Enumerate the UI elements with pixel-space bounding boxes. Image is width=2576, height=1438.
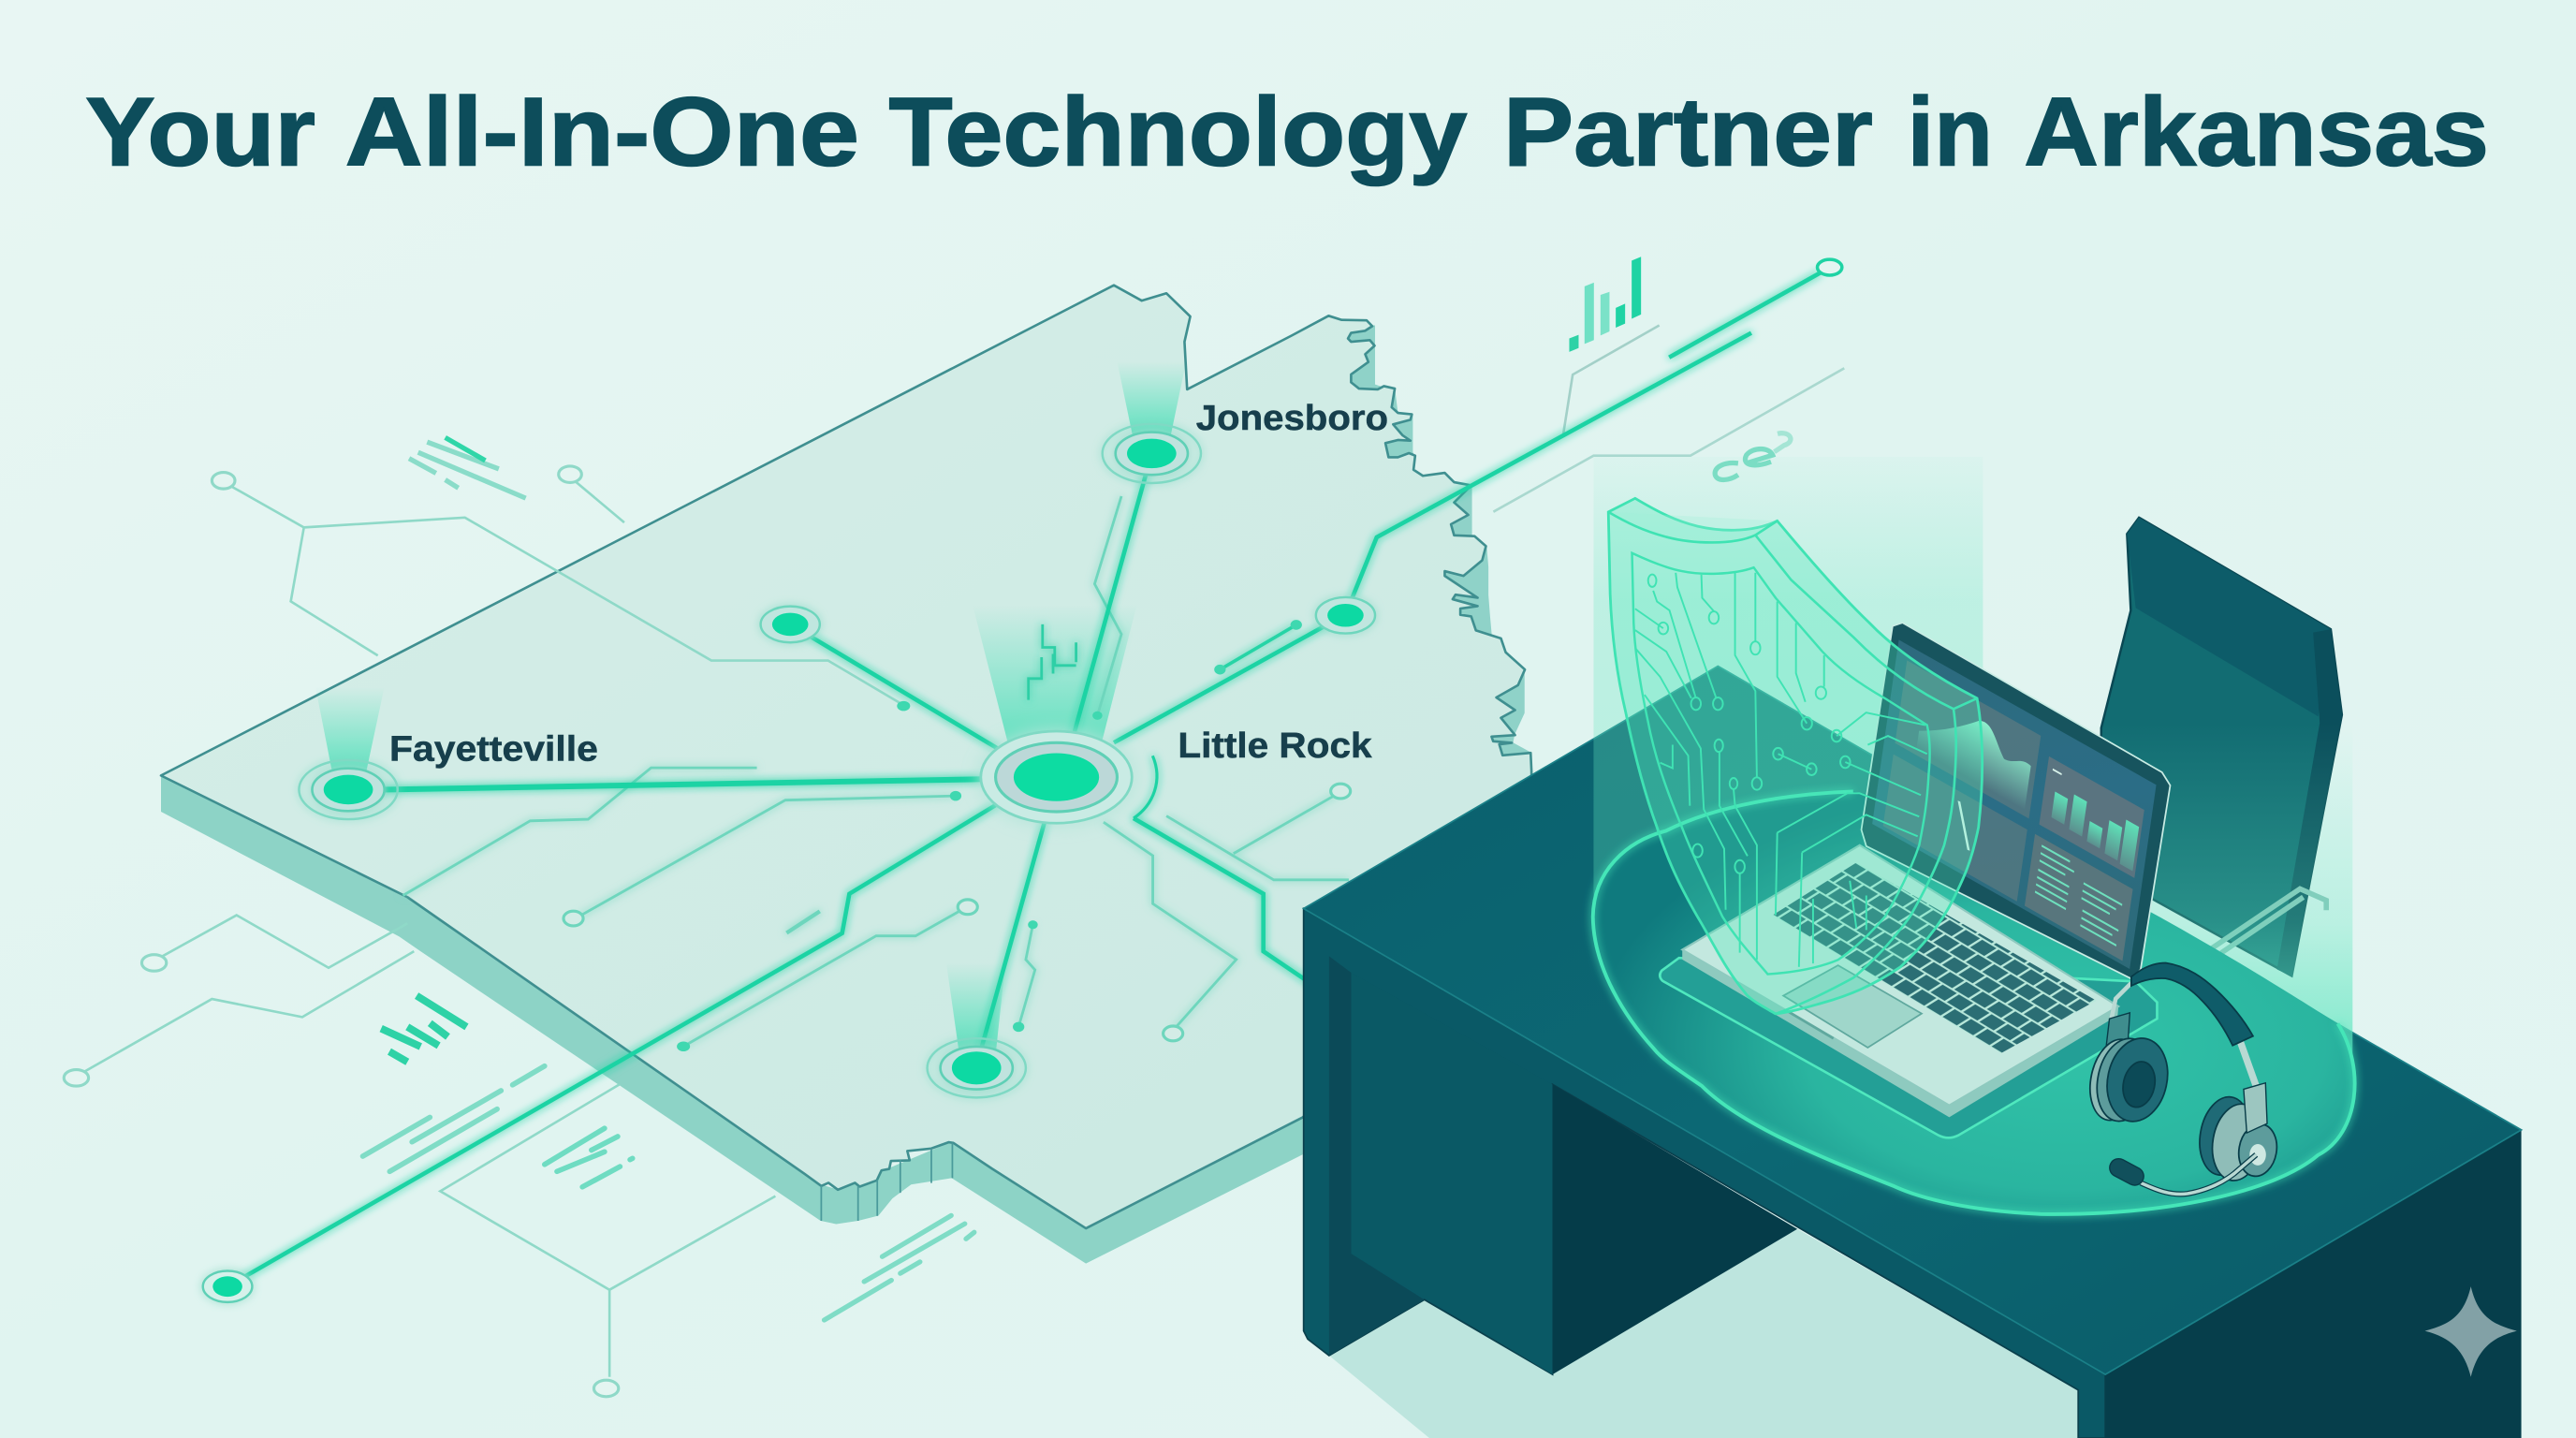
hologram right light column (1983, 723, 2352, 1086)
beam: Fayetteville (315, 687, 385, 779)
title: Arkansas (2024, 78, 2489, 186)
screen panel: list (1883, 755, 2027, 902)
dot: north trace (1092, 712, 1103, 720)
map of Arkansas (161, 286, 1533, 1264)
city label: Fayetteville: Fayetteville (389, 729, 598, 769)
shield silhouette (1608, 498, 1983, 1014)
map surface (161, 286, 1533, 1228)
headset left ear cup (2083, 1033, 2175, 1127)
laptop screen frame (1862, 623, 2170, 979)
pin: east node (1316, 597, 1375, 634)
line: Little Rock to south node (976, 814, 1046, 1068)
chair back (2101, 518, 2342, 976)
title: Partner (1503, 78, 1873, 186)
map pins (203, 424, 1375, 1302)
chair right edge (2277, 629, 2342, 976)
line: west node to Little Rock (790, 624, 999, 749)
headset left arm (2111, 983, 2131, 1020)
dot: west trace (897, 701, 910, 711)
desk side face (2105, 1130, 2522, 1438)
circuit: north west short (574, 479, 624, 522)
dot: south trace top (1028, 920, 1038, 929)
hologram left light column (1593, 457, 1983, 933)
node ring north west (212, 473, 235, 489)
circuit: north west (228, 485, 900, 703)
icon: north west data lines (409, 437, 526, 498)
icon: top right bar chart (1569, 257, 1641, 352)
desk body front (1304, 909, 2105, 1438)
trace: centre west (578, 796, 956, 917)
title: Your (85, 78, 315, 186)
screen panel: bar chart (2039, 756, 2144, 878)
line: Little Rock to far south west (227, 798, 1008, 1286)
pin: Little Rock hub (981, 731, 1132, 823)
pin light beams (315, 361, 1186, 1055)
watermark sparkle (2425, 1286, 2517, 1377)
pin: west node (761, 607, 820, 642)
desk top surface (1304, 666, 2522, 1374)
trace: north centre (1094, 496, 1121, 715)
circuit: chart leader (1563, 325, 1660, 433)
shield circuit traces (1635, 573, 1927, 967)
laptop base (1682, 845, 2118, 1106)
trace: south east lower (1104, 822, 1237, 1029)
pin: far south west node (203, 1271, 252, 1302)
trace: south parallel (1018, 925, 1035, 1027)
desk (1304, 666, 2522, 1438)
circuit: west lower (82, 951, 414, 1073)
shield top bevel (1608, 512, 1778, 542)
city label: Little Rock: Little Rock (1178, 726, 1373, 765)
node ring south (593, 1380, 619, 1397)
node ring west lower (64, 1070, 89, 1086)
title (85, 78, 2489, 186)
shadow: desk on floor (1329, 1229, 2078, 1438)
headset microphone boom (2141, 1154, 2256, 1195)
title: in (1908, 78, 1993, 186)
hologram base halo (1593, 791, 2355, 1214)
title: Technology (889, 78, 1468, 186)
desk under shadow (1553, 1084, 1797, 1374)
trace: south west parallel (683, 910, 961, 1047)
icon: south west data lines (363, 1066, 545, 1171)
line: Jonesboro to Little Rock (1068, 453, 1151, 756)
map trace end points (677, 620, 1302, 1051)
desk inner panel shadow (1329, 956, 1425, 1356)
dot: south trace bottom (1013, 1022, 1024, 1032)
headset left slider (2106, 1013, 2130, 1046)
laptop hinge notch (1789, 1012, 1834, 1038)
screen panel: text table (2025, 834, 2133, 961)
headset knob (2249, 1144, 2266, 1166)
headset band (2131, 962, 2253, 1046)
map east wall (1314, 325, 1531, 772)
chair headrest (2127, 518, 2331, 716)
city label: Jonesboro: Jonesboro (1196, 398, 1388, 437)
circuit: south west tree (440, 1084, 775, 1377)
icon: floating symbols (1715, 433, 1791, 479)
title: All-In-One (345, 78, 859, 186)
pin: south node (928, 1038, 1026, 1097)
shield circuit nodes (1648, 575, 1851, 873)
trace: west branch (403, 768, 757, 895)
line: north east short (1669, 272, 1821, 358)
icon: south east data lines (825, 1215, 974, 1320)
trace: small chip circuit (1029, 624, 1076, 700)
halo glowing rim (1593, 791, 2355, 1214)
laptop trackpad (1783, 965, 1922, 1048)
pin: Fayetteville (299, 760, 398, 819)
background circuit lines (82, 325, 1844, 1377)
holographic shield (1608, 498, 1983, 1014)
beam: Jonesboro (1117, 361, 1186, 440)
icon: south data lines block (545, 1128, 633, 1187)
map slab side (161, 775, 1303, 1264)
beam: Little Rock (973, 605, 1137, 759)
top right end node (1817, 259, 1842, 275)
halo fill (1593, 791, 2355, 1214)
chair (2101, 518, 2342, 976)
node ring north (559, 466, 581, 482)
dot: south west trace (677, 1042, 690, 1051)
line: east node to Little Rock (1114, 614, 1345, 742)
desk pedestal recess (1352, 973, 1553, 1374)
headset right ear cup (2194, 1093, 2281, 1184)
trace: south east (1166, 816, 1349, 880)
circuit: west upper (159, 916, 407, 968)
shield right bevel (1755, 536, 1977, 1014)
headset microphone (2106, 1155, 2147, 1188)
ring: east (1331, 784, 1351, 799)
ring: south east (1164, 1026, 1183, 1041)
node ring west upper (141, 955, 167, 971)
laptop keyboard (1773, 862, 2097, 1053)
dot: east upper (1291, 620, 1302, 630)
trace: east (1234, 792, 1340, 854)
main network lines (227, 272, 1821, 1286)
dot: east lower (1214, 665, 1225, 674)
trace: east parallel (1220, 624, 1296, 669)
headset right slider (2244, 1083, 2267, 1133)
ring: south centre (958, 900, 977, 915)
shield inner border (1632, 553, 1930, 975)
map open rings (564, 784, 1351, 1041)
headset right arm (2241, 1042, 2256, 1086)
laptop (1660, 623, 2170, 1137)
dot: centre west (950, 791, 961, 800)
pin: Jonesboro (1103, 424, 1201, 483)
line: east node to north east (1345, 333, 1751, 614)
laptop base front lip (1682, 949, 2118, 1117)
chair armrest (2210, 888, 2326, 953)
trace: small dash (786, 911, 820, 933)
screen panel: wave chart (1895, 660, 2041, 818)
icon: south west bar chart (381, 996, 466, 1062)
arc beside Little Rock (1134, 756, 1157, 818)
map secondary circuit traces (403, 496, 1349, 1047)
beam: south node (946, 962, 1005, 1055)
ring: centre west (564, 911, 583, 926)
laptop screen (1872, 639, 2157, 969)
headset (2083, 962, 2281, 1195)
line: Little Rock to south east (1134, 818, 1314, 986)
line: Fayetteville to Little Rock (348, 779, 1003, 790)
laptop mat (1660, 958, 2157, 1137)
node rings outside the map (64, 466, 619, 1397)
circuit: north east faint (1493, 368, 1844, 512)
map south jag wall ribs (821, 1143, 952, 1221)
